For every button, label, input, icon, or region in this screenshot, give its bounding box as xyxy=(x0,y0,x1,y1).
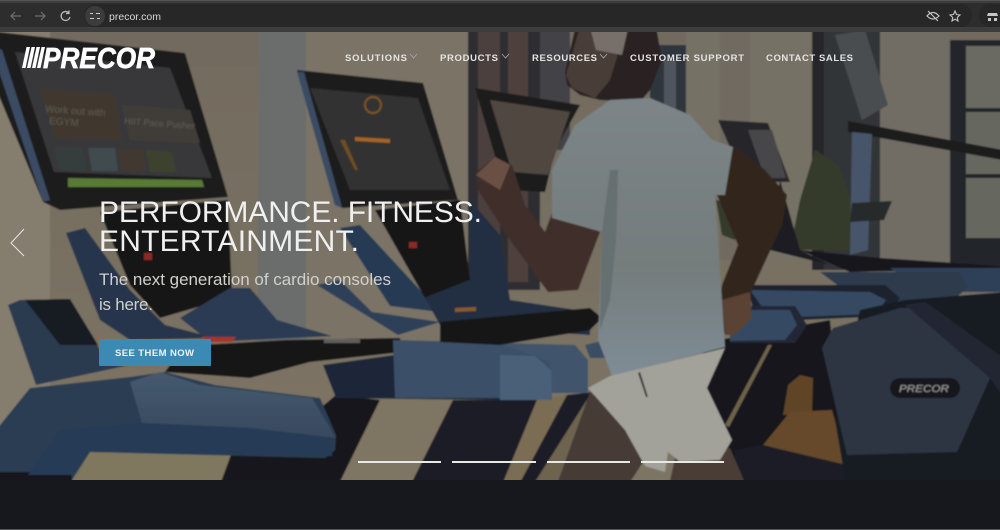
address bar xyxy=(84,4,972,27)
plant xyxy=(716,150,855,250)
bottom edge line xyxy=(0,529,1000,530)
hero heading xyxy=(99,196,482,258)
chevron xyxy=(502,54,509,58)
hero subheading: is here. xyxy=(99,295,153,314)
logo stripes xyxy=(22,47,45,68)
nav: resources: RESOURCES xyxy=(532,53,597,64)
logo wordmark: PRECOR xyxy=(43,43,155,75)
nav: contact sales: CONTACT SALES xyxy=(766,53,853,64)
elliptical machine with logo panel: PRECOR xyxy=(899,384,949,395)
treadmill console behind runner xyxy=(475,88,580,192)
runner xyxy=(476,20,787,490)
call to action button xyxy=(99,339,211,366)
nav: products: PRODUCTS xyxy=(440,53,498,64)
navigation xyxy=(345,53,853,64)
nav: customer support: CUSTOMER SUPPORT xyxy=(630,53,744,64)
call to action button: SEE THEM NOW xyxy=(115,348,194,359)
runner shorts xyxy=(588,348,732,472)
bottom dark band xyxy=(0,480,1000,529)
treadmill left handle and base xyxy=(0,337,500,490)
back arrow icon xyxy=(11,12,21,20)
treadmill uprights xyxy=(8,200,590,385)
browser toolbar xyxy=(0,0,1000,32)
nav: solutions: SOLUTIONS xyxy=(345,53,407,64)
treadmill right rails and frames xyxy=(703,249,1000,480)
url text: precor.com xyxy=(109,11,161,23)
incognito profile chip xyxy=(979,4,1000,27)
chevron xyxy=(600,54,607,58)
treadmill console left: EGYM xyxy=(49,116,79,129)
runner head xyxy=(564,32,662,101)
treadmill legs and floor xyxy=(220,392,592,480)
carousel indicators xyxy=(358,461,724,463)
runner shirt xyxy=(552,98,733,376)
treadmill console left: Work out with xyxy=(45,104,106,119)
treadmill middle rail xyxy=(393,307,606,400)
hero heading: PERFORMANCE. FITNESS. xyxy=(99,196,482,229)
hidden eye icon xyxy=(927,11,939,21)
hero subheading: The next generation of cardio consoles xyxy=(99,270,391,289)
far background console and pole xyxy=(718,30,1000,265)
runner right arm xyxy=(715,145,787,335)
chevron xyxy=(410,54,417,58)
elliptical machine with logo panel xyxy=(822,292,1000,469)
forward arrow icon xyxy=(35,12,45,20)
treadmill console left xyxy=(0,30,228,210)
runner left arm xyxy=(476,157,600,292)
hero heading: ENTERTAINMENT. xyxy=(99,225,359,258)
logo xyxy=(22,43,155,75)
site info icon xyxy=(85,6,105,26)
treadmill console left: HIIT Pace Pusher xyxy=(124,116,195,131)
carousel previous arrow xyxy=(11,229,24,256)
runner legs xyxy=(558,393,643,480)
treadmill console middle xyxy=(297,70,458,208)
reload icon xyxy=(61,10,70,20)
hero subheading xyxy=(99,270,391,314)
star icon xyxy=(950,11,960,21)
